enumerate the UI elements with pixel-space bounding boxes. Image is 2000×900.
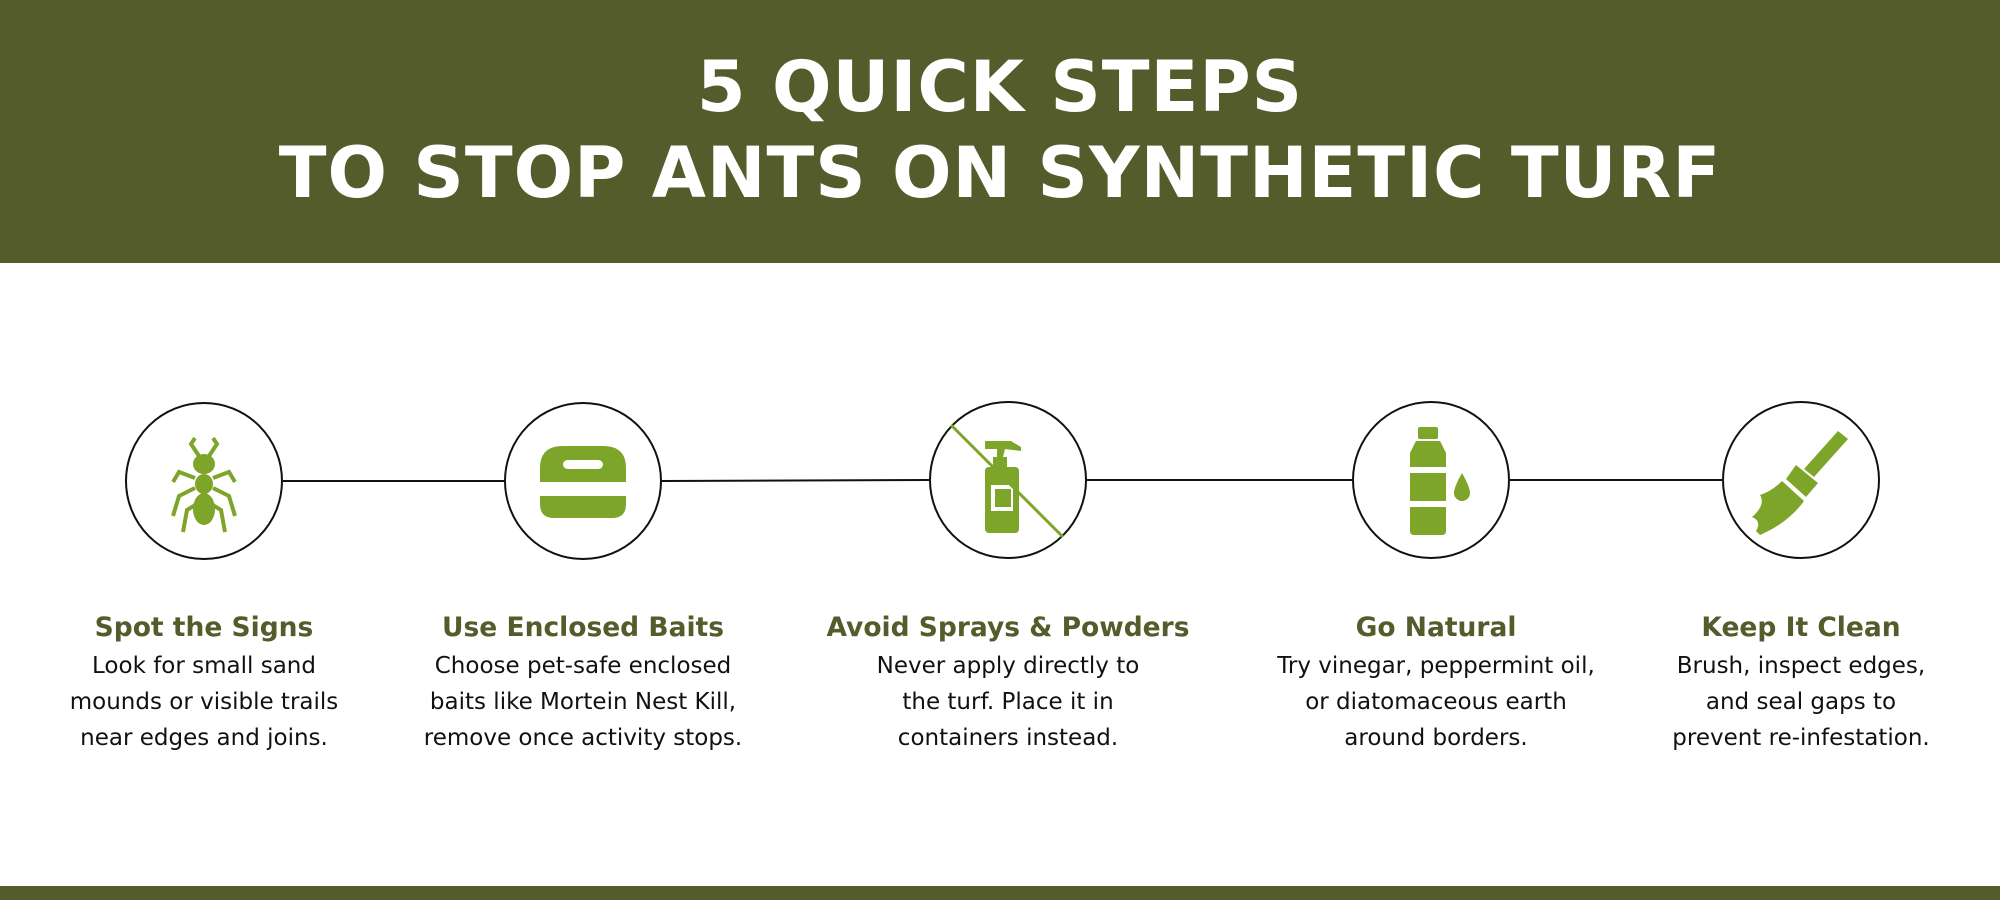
step 5 text: and seal gaps to xyxy=(1706,689,1896,715)
step 4 text xyxy=(1277,612,1595,751)
step 5 text xyxy=(1672,612,1930,751)
step 5 text: prevent re-infestation. xyxy=(1672,725,1930,751)
title: TO STOP ANTS ON SYNTHETIC TURF xyxy=(279,132,1721,214)
icon: no spray xyxy=(929,401,1087,559)
step 5 text: Brush, inspect edges, xyxy=(1677,653,1925,679)
step 2 text: remove once activity stops. xyxy=(424,725,742,751)
step 4 text: or diatomaceous earth xyxy=(1305,689,1567,715)
icon: bait xyxy=(504,402,662,560)
icon: bottle drop xyxy=(1352,401,1510,559)
step 1 text: near edges and joins. xyxy=(80,725,328,751)
footer band xyxy=(0,886,2000,900)
step 4 text: Go Natural xyxy=(1356,612,1516,643)
step 3 text: containers instead. xyxy=(898,725,1118,751)
step 1 text xyxy=(70,612,338,751)
icon: broom xyxy=(1722,401,1880,559)
step 2 text: baits like Mortein Nest Kill, xyxy=(430,689,736,715)
step 2 text xyxy=(424,612,742,751)
step 5 text: Keep It Clean xyxy=(1701,612,1901,643)
step 4 text: around borders. xyxy=(1344,725,1528,751)
step 3 text xyxy=(826,612,1190,751)
step 1 text: Spot the Signs xyxy=(95,612,313,643)
title xyxy=(279,46,1721,214)
step 2 text: Choose pet-safe enclosed xyxy=(435,653,731,679)
step 2 text: Use Enclosed Baits xyxy=(442,612,724,643)
step 4 text: Try vinegar, peppermint oil, xyxy=(1277,653,1595,679)
step 1 text: Look for small sand xyxy=(92,653,316,679)
step 1 text: mounds or visible trails xyxy=(70,689,338,715)
icon: ant xyxy=(125,402,283,560)
title: 5 QUICK STEPS xyxy=(697,46,1303,128)
step 3 text: the turf. Place it in xyxy=(902,689,1114,715)
step 3 text: Never apply directly to xyxy=(877,653,1139,679)
step 3 text: Avoid Sprays & Powders xyxy=(826,612,1190,643)
header band xyxy=(0,0,2000,263)
